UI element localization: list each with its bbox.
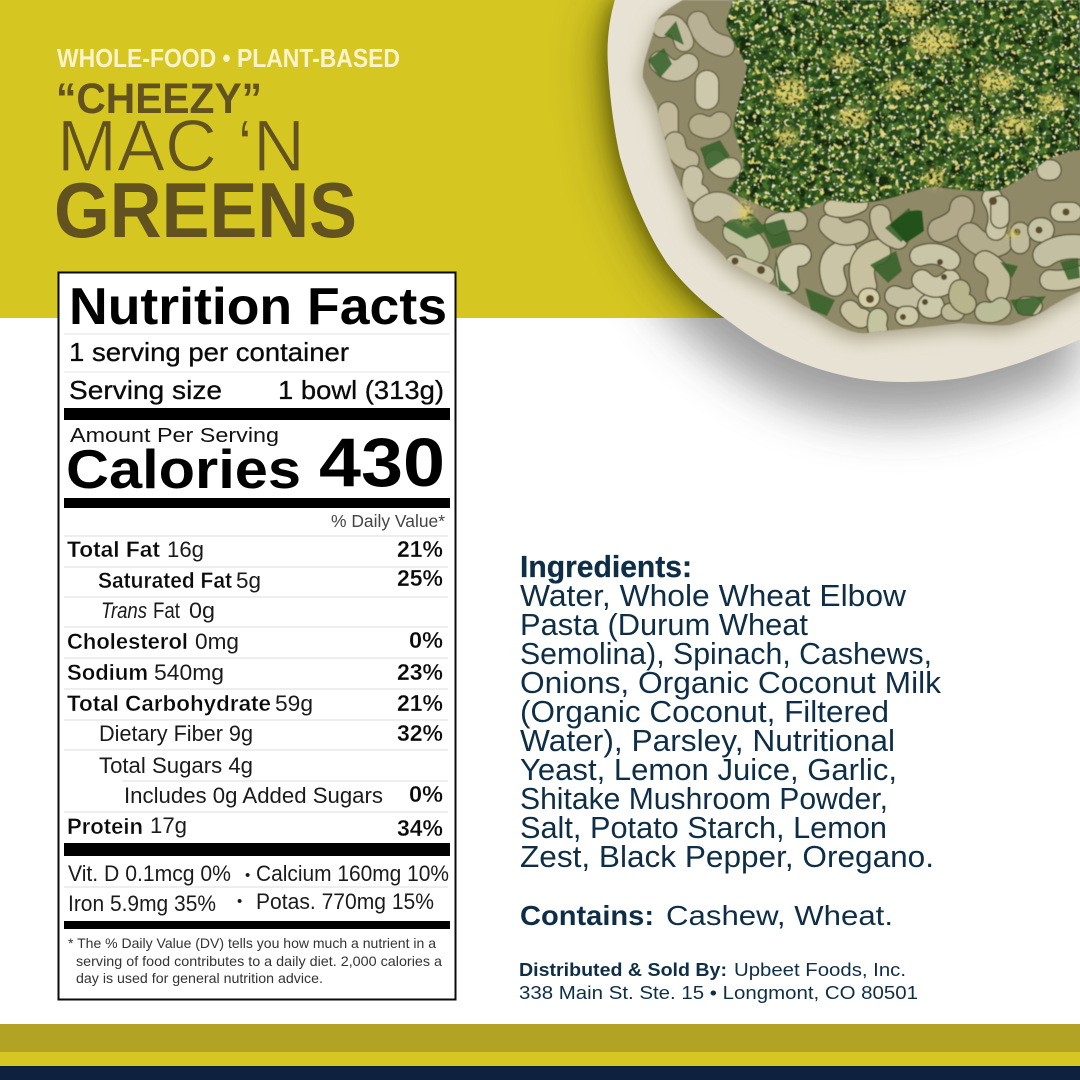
nutrient table: 0g [189,598,215,623]
ingredients list: (Organic Coconut, Filtered [520,694,889,729]
vitamins and minerals: Iron 5.9mg 35% [68,891,216,916]
yellow header background [0,0,1080,318]
ingredients list: Pasta (Durum Wheat [520,607,808,642]
title line: greens: GREENS [54,166,357,254]
ingredients list: Water), Parsley, Nutritional [520,723,895,758]
nutrient table: Total Carbohydrate [67,691,271,716]
ingredients list: Semolina), Spinach, Cashews, [520,636,932,671]
thick divider above vitamins [64,843,450,856]
macaroni [660,22,1080,330]
ingredients list: Yeast, Lemon Juice, Garlic, [520,752,897,787]
panel frame [58,272,456,1000]
nutrient table: 540mg [154,660,224,685]
nutrient table: 5g [236,568,261,593]
vitamins and minerals: Calcium 160mg 10% [256,861,449,886]
distributor: Distributed & Sold By: [519,960,727,980]
ingredients list: Water, Whole Wheat Elbow [520,578,907,613]
nutrient table: Sodium [67,660,148,685]
heading: nutrition facts: Nutrition Facts [69,278,447,336]
distributor [519,960,918,1003]
ingredients heading: Ingredients: [520,549,692,584]
food and topping [643,0,1080,333]
nutrient table: 16g [167,537,204,562]
ingredients list: Onions, Organic Coconut Milk [520,665,942,700]
vitamins and minerals: • [237,893,242,910]
single parsley leaf [890,210,924,243]
calories: Calories [66,438,301,500]
bowl shadow on yellow background [572,0,724,318]
nutrient table: 34% [397,815,443,841]
panel: nutrition facts [58,272,456,1000]
vitamins and minerals: Potas. 770mg 15% [256,889,434,914]
macaroni holes [732,197,1070,320]
nutrient table: Includes 0g Added Sugars [124,783,383,808]
nutrient table [64,536,448,841]
nutrient table: Trans [101,598,147,623]
bowl shadow on white background [634,318,1080,451]
calories: 430 [319,424,445,501]
title line: cheezy: “CHEEZY” [56,75,262,123]
serving information: Serving size [69,375,222,405]
distributor: Upbeet Foods, Inc. [734,960,906,980]
ingredients list: Shitake Mushroom Powder, [520,781,888,816]
serving information: 1 bowl (313g) [278,375,444,405]
tagline: WHOLE-FOOD • PLANT-BASED [57,43,400,73]
footnote [68,935,442,986]
footnote: * The % Daily Value (DV) tells you how much a nutrient in a [68,935,436,951]
calories [66,424,445,501]
thick divider [64,408,450,420]
vitamins and minerals: • [245,867,250,884]
bowl rim [607,0,1080,382]
ingredients list [520,578,942,874]
serving information: 1 serving per container [69,337,349,367]
allergen statement: Cashew, Wheat. [666,900,893,931]
nutrient table: 25% [397,565,443,591]
parsley and lemon zest topping [726,0,1080,214]
ingredients list: Salt, Potato Starch, Lemon [520,810,887,845]
nutrient table: Total Fat [67,537,161,562]
daily value header: % Daily Value* [331,511,445,531]
serving information [64,334,450,405]
title block [54,43,400,254]
nutrient table: 21% [397,690,443,716]
nutrient table: 23% [397,659,443,685]
nutrient table: Dietary Fiber 9g [99,721,253,746]
nutrient table: 32% [397,720,443,746]
nutrient table: Saturated Fat [98,568,232,593]
footnote: day is used for general nutrition advice. [76,970,323,986]
nutrient table: Protein [67,814,143,839]
nutrient table: 0% [409,627,443,653]
footnote: serving of food contributes to a daily diet. 2,000 calories a [76,953,442,969]
vitamins and minerals [64,861,449,916]
bowl inner wall shading [641,6,1080,339]
photo: bowl of mac and greens [607,0,1080,382]
calories: Amount Per Serving [70,425,279,447]
nutrient table: 59g [275,691,313,716]
nutrient table: Total Sugars 4g [99,753,253,778]
ingredients list: Zest, Black Pepper, Oregano. [520,839,934,874]
title line: mac n: MAC ‘N [57,106,305,187]
food base [643,0,1080,333]
nutrient table: Cholesterol [67,629,188,654]
footer color bands [0,1024,1080,1080]
vitamins and minerals: Vit. D 0.1mcg 0% [68,861,231,886]
nutrient table: Fat [153,598,181,623]
nutrient table: 0mg [195,629,239,654]
nutrient table: 21% [397,536,443,562]
divider above footnote [64,921,450,929]
lemon zest clusters [733,0,1070,240]
nutrient table: 17g [150,813,187,838]
allergen statement [520,900,893,931]
allergen statement: Contains: [520,900,654,931]
nutrient table: 0% [409,781,443,807]
distributor: 338 Main St. Ste. 15 • Longmont, CO 80501 [519,983,918,1003]
medium divider [64,498,450,508]
ingredients block [519,549,942,1003]
spinach in sauce [648,21,1080,316]
